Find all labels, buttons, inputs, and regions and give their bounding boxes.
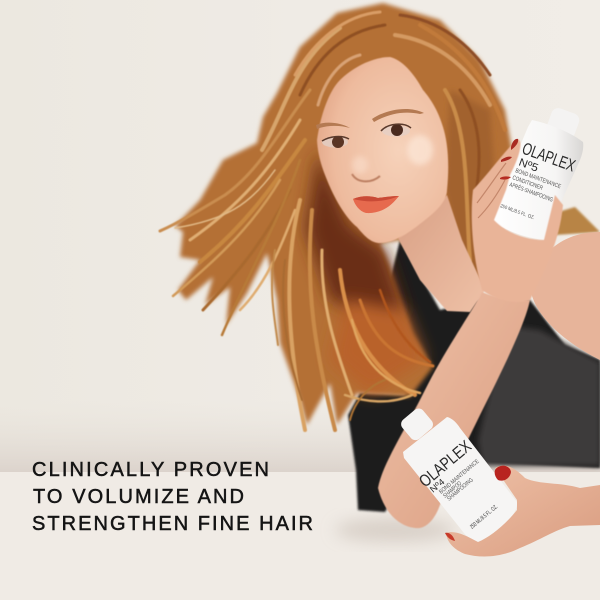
hair shadow near face <box>305 150 405 330</box>
cap <box>545 106 581 140</box>
product label <box>415 437 499 531</box>
product label: APRÈS-SHAMPOOING <box>508 181 554 204</box>
nose <box>352 174 380 181</box>
headline: STRENGTHEN FINE HAIR <box>32 513 313 535</box>
black top <box>348 240 600 512</box>
forearm <box>378 292 530 528</box>
product label: 250 ML/8.5 FL. OZ. <box>469 504 499 531</box>
finger separations <box>477 163 506 218</box>
product label <box>499 139 578 221</box>
nail <box>495 466 511 481</box>
product label: CONDITIONER <box>511 175 544 192</box>
cap <box>399 406 435 443</box>
nail <box>445 533 455 541</box>
eyebrows <box>372 109 424 122</box>
product label: Nº5 <box>517 157 540 175</box>
table surface <box>0 472 600 600</box>
hair mass <box>160 3 600 430</box>
nails <box>511 139 518 150</box>
hair strands <box>160 12 505 430</box>
lips <box>353 196 399 213</box>
headline <box>32 459 313 535</box>
product label: SHAMPOOING <box>446 477 475 503</box>
product label: SHAMPOO <box>442 481 463 500</box>
bottle no. 5 <box>492 106 583 240</box>
headline: TO VOLUMIZE AND <box>33 486 244 508</box>
product label: OLAPLEX <box>520 139 578 176</box>
right shoulder <box>530 232 600 360</box>
headline: CLINICALLY PROVEN <box>32 459 269 481</box>
neck and chest <box>398 195 485 312</box>
product label: BOND MAINTENANCE <box>514 168 561 190</box>
bottle body <box>492 120 583 240</box>
product label: OLAPLEX <box>415 437 475 491</box>
hand holding bottle no. 5 <box>472 139 563 302</box>
bottle no. 4 <box>399 406 517 542</box>
eyes <box>382 126 410 136</box>
bottle body <box>403 417 517 542</box>
product label: 250 ML/8.5 FL. OZ. <box>499 203 535 221</box>
product label: BOND MAINTENANCE <box>438 459 481 496</box>
background wall <box>0 0 600 474</box>
hand holding bottle no. 4 <box>445 466 600 556</box>
hair behind hand, right side <box>548 207 600 235</box>
face <box>316 57 448 243</box>
product label: Nº4 <box>428 477 447 495</box>
